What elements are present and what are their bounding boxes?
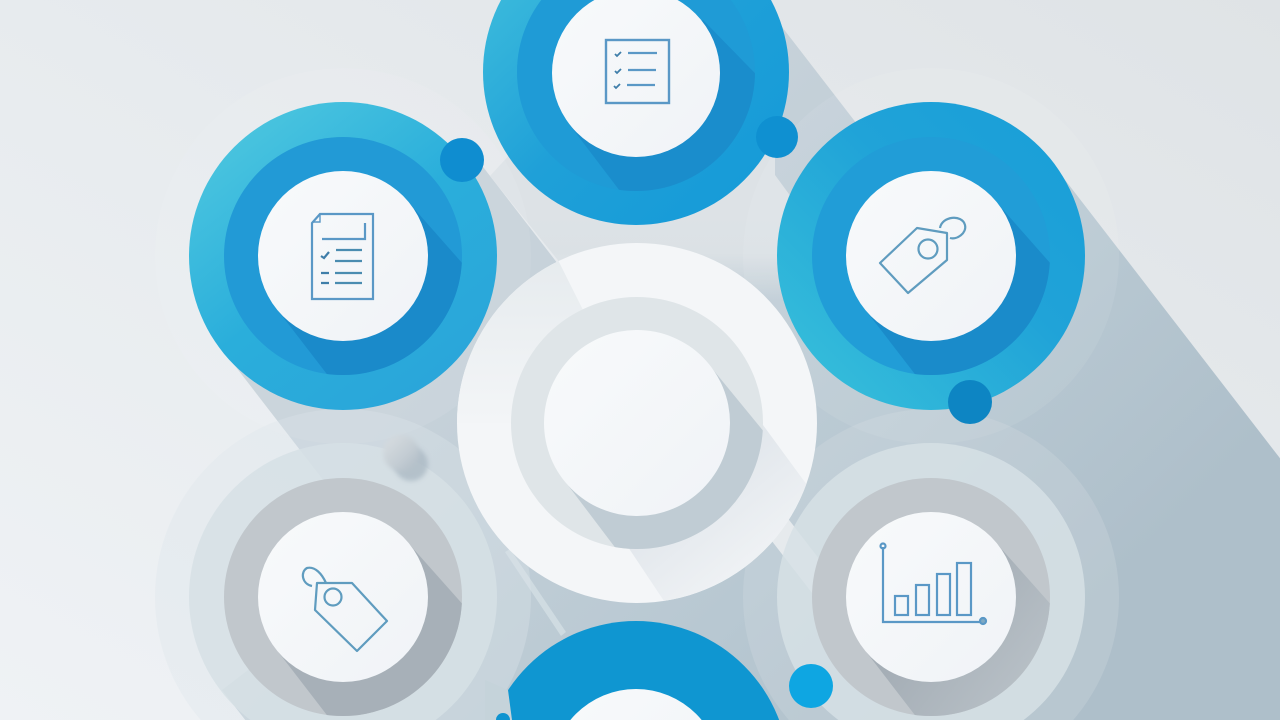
outer circle [189,102,497,410]
outer circle [189,443,497,720]
connector dot: grey [383,435,428,481]
outer disc [457,243,817,603]
ring shadow [568,371,763,549]
connector dot: left [440,138,484,182]
connector dot: bottom [789,664,833,708]
icon: price tag [880,218,965,293]
left notch [485,680,512,720]
outer ring [483,621,789,720]
light streak between shadows [505,549,566,636]
ring shadow [281,206,462,375]
lighter zone beneath top circle [490,100,830,300]
white disc [846,512,1016,682]
node: lower left grey [189,450,497,720]
inner disc [544,330,730,516]
ring shadow [867,548,1050,716]
icon: bar chart [880,544,986,624]
ring shadow [279,547,462,716]
disc shading [457,262,806,601]
icon: price tag [303,568,387,651]
white disc [846,171,1016,341]
node: lower right grey [777,443,1118,720]
connector dot: top [756,116,798,158]
white disc [552,0,720,157]
ring shadow [570,20,755,191]
node: bottom blue [483,621,789,720]
middle ring [511,297,763,549]
connector dot: right [948,380,992,424]
white disc [258,171,428,341]
ring [224,478,462,716]
outer circle [777,102,1085,410]
node: right blue [777,102,1085,410]
ring shadow [868,206,1050,375]
halos around circles [155,68,1119,720]
outer circle [777,443,1085,720]
outer circle [483,0,789,225]
ring [812,137,1050,375]
icon: checklist [606,40,669,103]
ring [224,137,462,375]
icon: document checklist [312,214,373,299]
center node [457,243,817,603]
white disc [551,689,721,720]
ring [812,478,1050,716]
node: top blue [483,0,789,225]
connector dot: bottom left small [496,713,510,720]
ring [517,0,755,191]
white disc [258,512,428,682]
node: left blue [189,102,497,410]
